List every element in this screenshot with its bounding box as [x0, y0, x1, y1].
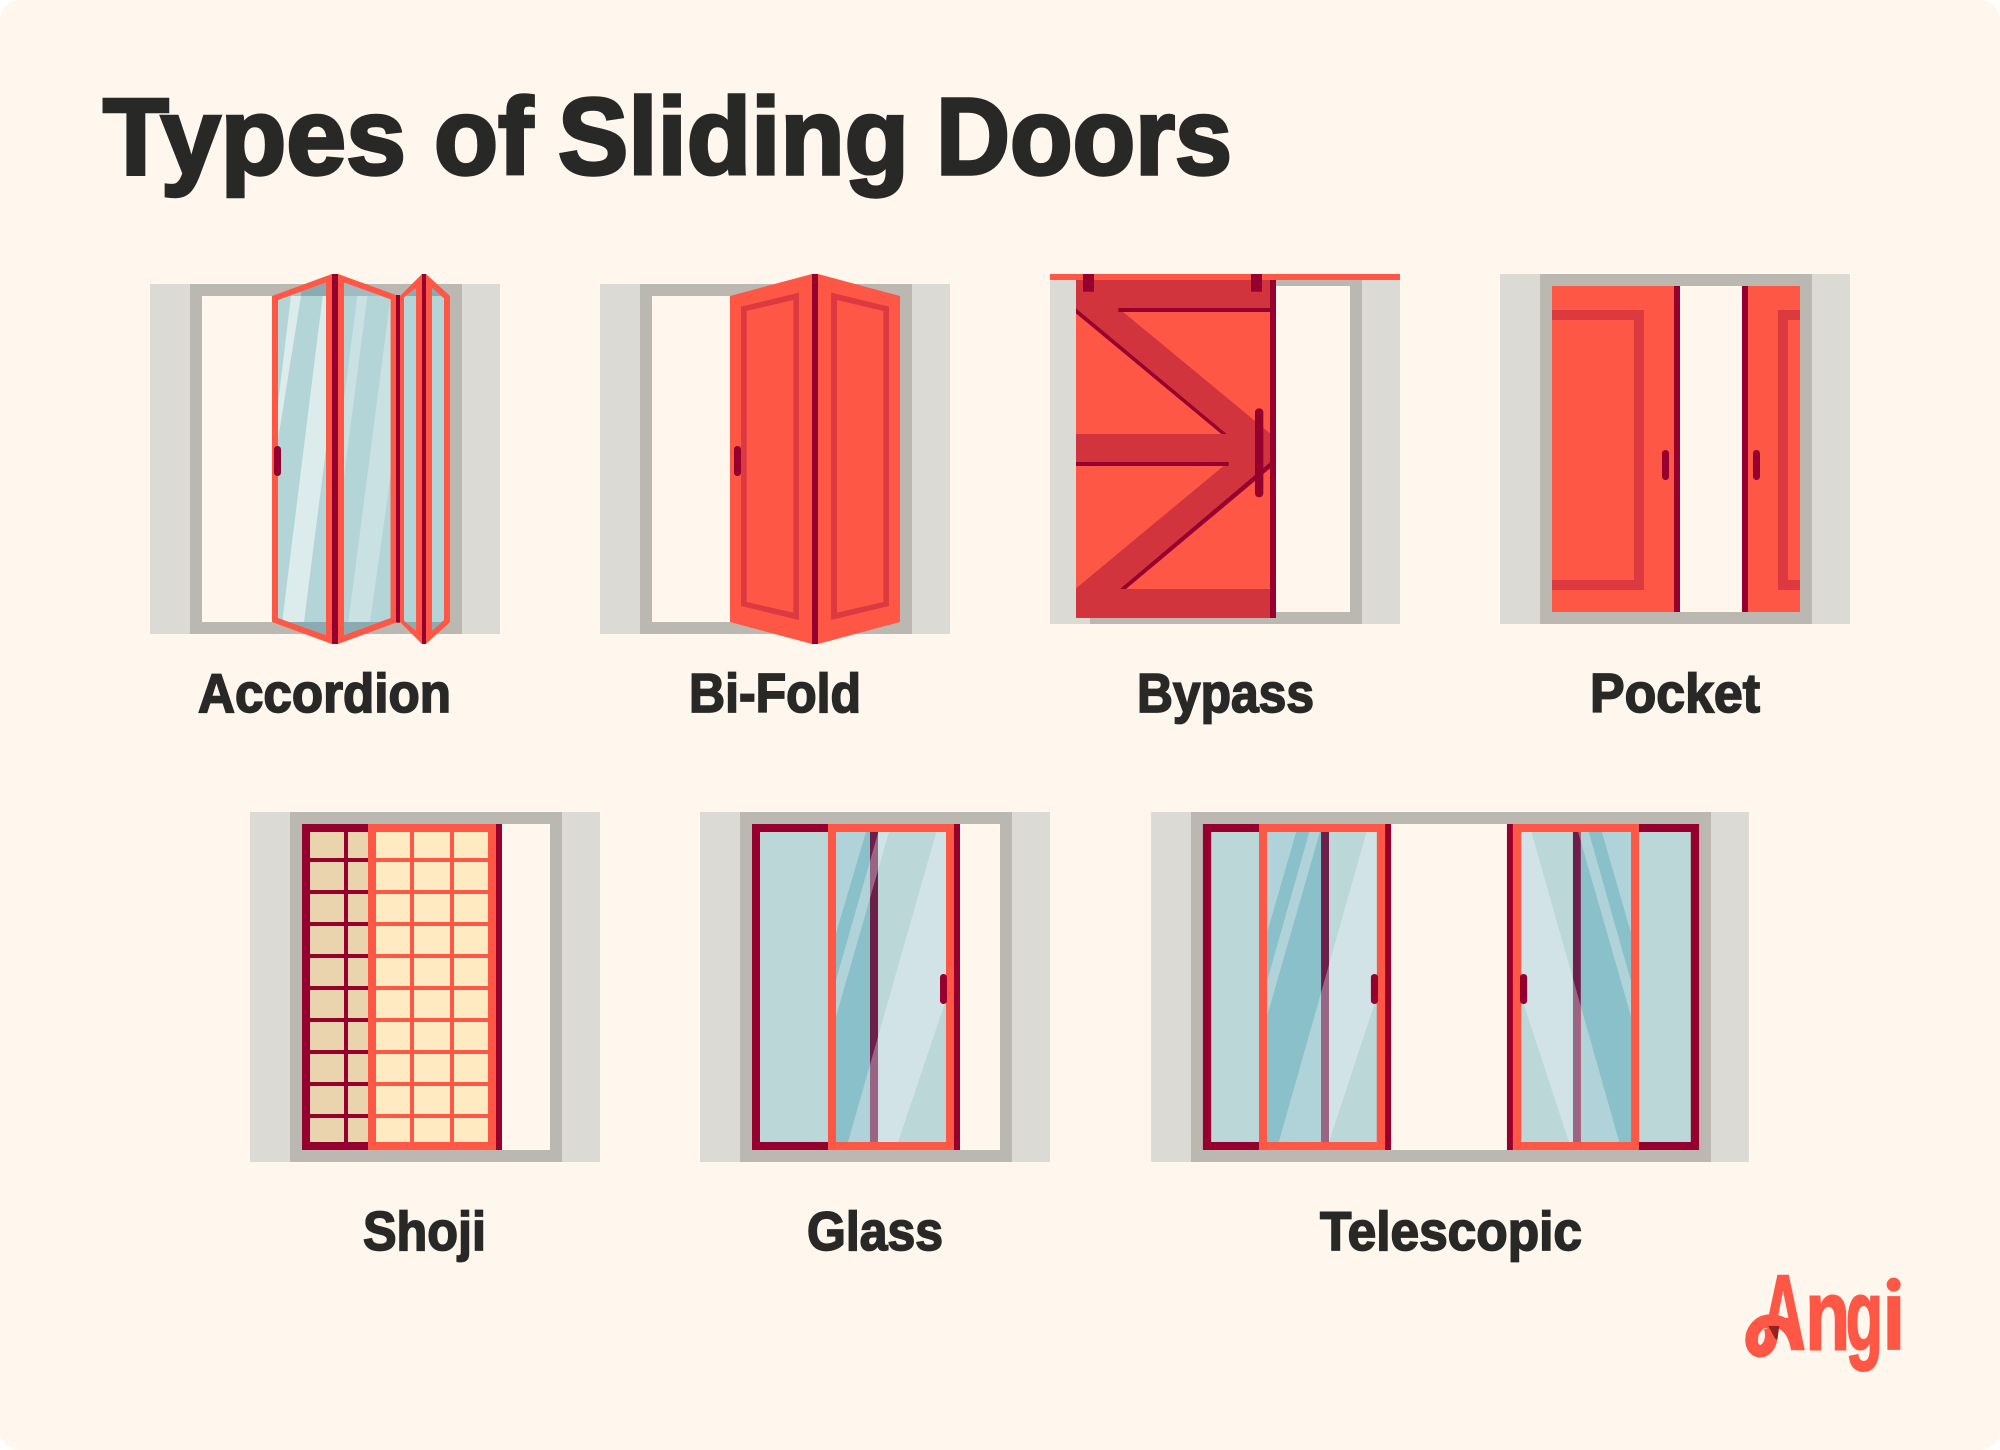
- door illustration: bi-fold: [600, 274, 950, 644]
- door frame: [640, 284, 912, 634]
- door frame: [1191, 812, 1711, 1162]
- hanger left: [1083, 274, 1094, 292]
- logo: Angi: [1752, 1252, 1906, 1372]
- door illustration: bypass: [1050, 274, 1400, 624]
- folding panel two: [338, 274, 396, 644]
- door illustration: shoji: [250, 812, 600, 1162]
- handle: [940, 974, 947, 1004]
- handle: [734, 446, 741, 476]
- title: Doors: [936, 76, 1232, 198]
- logo loop: [1752, 1321, 1797, 1351]
- label: telescopic: Telescopic: [1320, 1200, 1582, 1262]
- opening: [652, 296, 900, 622]
- opening: [1552, 286, 1800, 612]
- opening: [1102, 286, 1350, 612]
- label: accordion: Accordion: [198, 662, 451, 724]
- folding panel one: [272, 274, 332, 644]
- right handle: [1520, 974, 1527, 1004]
- label: pocket: Pocket: [1590, 662, 1760, 724]
- handle: [1255, 408, 1263, 497]
- label: glass: Glass: [807, 1200, 943, 1262]
- logo dot mask: [1885, 1273, 1903, 1294]
- right front door: [1513, 824, 1639, 1150]
- door frame: [1540, 274, 1812, 624]
- front panel: [368, 824, 496, 1150]
- logo letter g: g: [1846, 1259, 1883, 1371]
- door frame: [290, 812, 562, 1162]
- left front door: [1259, 824, 1385, 1150]
- door frame: [740, 812, 1012, 1162]
- title: [103, 76, 1232, 198]
- left handle: [1371, 974, 1378, 1004]
- label: shoji: Shoji: [363, 1200, 486, 1262]
- door frame: [190, 284, 462, 634]
- logo mask behind loop: [1757, 1328, 1783, 1353]
- hinge: [812, 274, 818, 644]
- opening: [202, 296, 450, 622]
- door illustration: telescopic: [1151, 812, 1749, 1162]
- title: Types: [103, 76, 406, 198]
- door illustration: pocket: [1500, 274, 1850, 624]
- back door: [752, 824, 960, 1150]
- hinge: [396, 295, 400, 623]
- door illustration: accordion: [150, 274, 500, 644]
- folding panel four: [426, 274, 450, 644]
- wall: [700, 812, 1050, 1162]
- right back door: [1507, 824, 1699, 1150]
- right door: [1742, 286, 1800, 612]
- opening: [302, 824, 550, 1150]
- left back door: [1203, 824, 1391, 1150]
- hinge: [332, 274, 338, 644]
- front door: [828, 824, 954, 1150]
- logo letter A: A: [1761, 1252, 1806, 1372]
- hanger right: [1251, 274, 1262, 292]
- logo loop shadow: [1768, 1326, 1779, 1340]
- logo letter n: n: [1805, 1259, 1850, 1371]
- logo letter i: i: [1881, 1259, 1906, 1371]
- door illustration: glass: [700, 812, 1050, 1162]
- left leaf: [730, 274, 812, 644]
- right handle: [1753, 450, 1760, 480]
- title: Sliding: [558, 76, 909, 198]
- wall: [250, 812, 600, 1162]
- wall: [1500, 274, 1850, 624]
- hinge: [422, 274, 426, 644]
- logo dot: [1887, 1278, 1901, 1292]
- left door: [1552, 286, 1680, 612]
- title: of: [434, 76, 534, 198]
- label: bi-fold: Bi-Fold: [689, 662, 861, 724]
- wall: [1151, 812, 1749, 1162]
- opening: [1203, 824, 1699, 1150]
- left handle: [1662, 450, 1669, 480]
- opening: [752, 824, 1000, 1150]
- door frame: [1090, 280, 1362, 624]
- barn door: [1076, 280, 1276, 618]
- rail: [1050, 274, 1400, 280]
- wall: [1050, 274, 1400, 624]
- folding panel three: [400, 274, 422, 644]
- handle: [274, 446, 281, 476]
- wall: [150, 284, 500, 634]
- right leaf: [818, 274, 900, 644]
- label: bypass: Bypass: [1137, 662, 1314, 724]
- wall: [600, 284, 950, 634]
- back panel: [302, 824, 502, 1150]
